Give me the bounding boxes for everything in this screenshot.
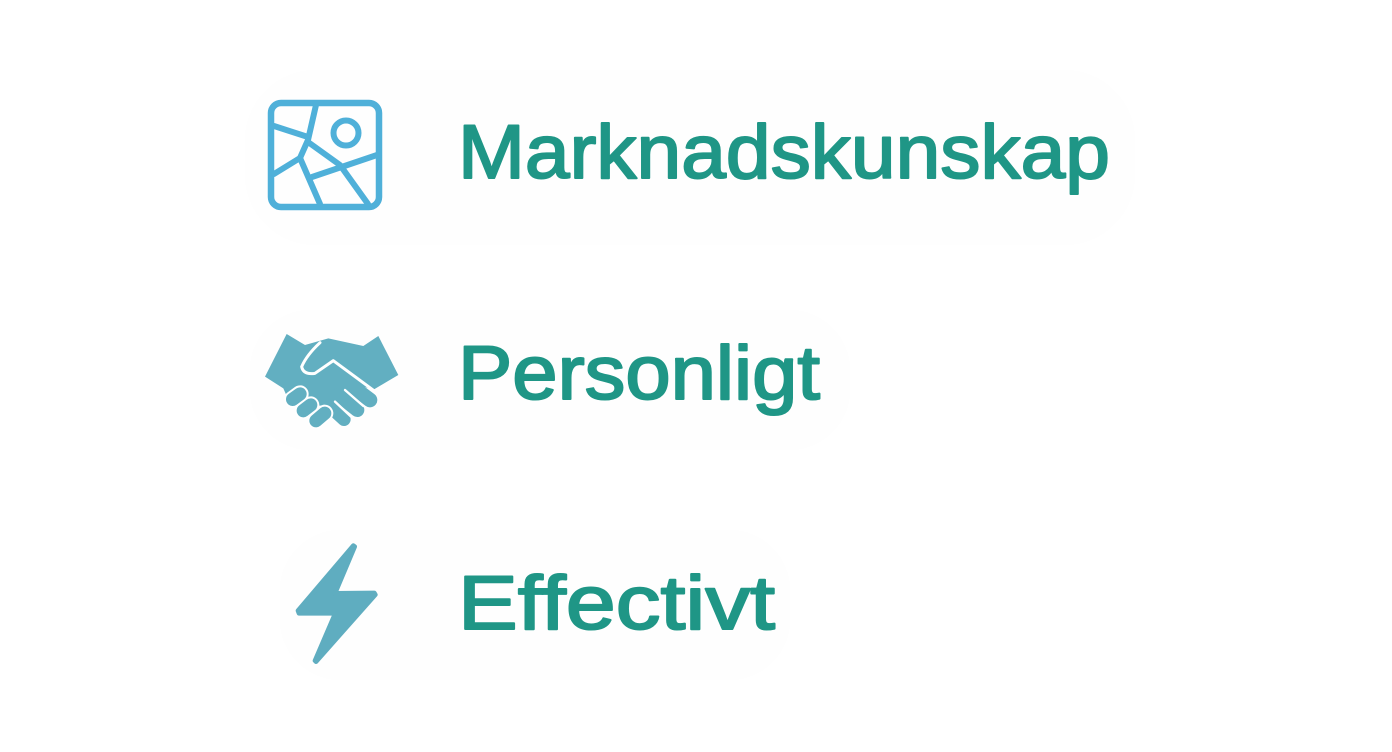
row: Marknadskunskap [271,103,1110,207]
icon: handshake [265,334,398,421]
row: Personligt [265,331,820,421]
label: Marknadskunskap: Marknadskunskap [458,110,1110,195]
icon: lightning bolt [298,546,375,662]
icon: map [271,103,379,207]
row: Effectivt [298,546,775,662]
label: Personligt: Personligt [458,331,820,416]
label: Effectivt: Effectivt [458,561,775,646]
